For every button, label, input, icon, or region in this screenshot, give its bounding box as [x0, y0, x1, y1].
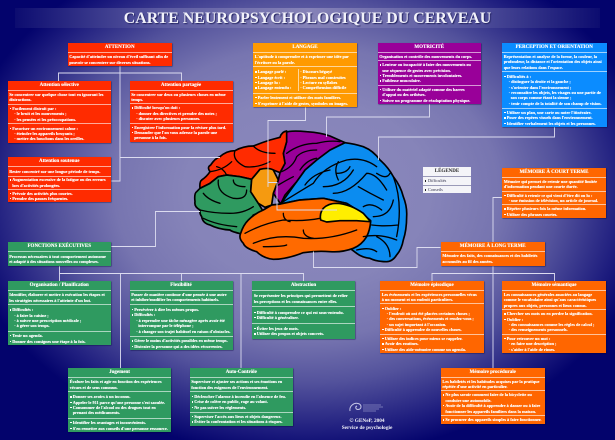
panel: mémoire procédurale — [441, 368, 545, 424]
panel: mémoire épisodique: - des conversations, événements et rendez-vous ; — [387, 316, 474, 321]
panel: flexibilité: et inhiber/modifier les comportements habituels. — [131, 297, 219, 302]
panel: mémoire épisodique: Oublier : — [385, 306, 401, 311]
panel: attention sélective: - mettre des bouchons dans les oreilles. — [14, 136, 84, 141]
panel: jugement: Donner ses avoirs à un inconnu. — [73, 394, 130, 399]
panel: langage: S'exprimer à l'aide de gestes, symboles ou images. — [258, 100, 348, 106]
panel: langage: Parler lentement et utiliser des mots familiers. — [258, 95, 341, 100]
panel: flexibilité: - à reprendre une tâche ménagère après avoir été — [136, 318, 225, 323]
panel: motricité: Utiliser du matériel adapté comme des barres — [382, 87, 465, 92]
panel: perception et orientation: - s'orienter dans l'environnement ; — [509, 85, 571, 90]
panel: organisation / planification — [8, 281, 111, 345]
panel: attention: ATTENTION — [105, 45, 135, 50]
panel: mémoire épisodique: Utiliser des indices pour mieux se rappeler. — [385, 336, 462, 341]
panel: abstraction: Se représenter les principes qui permettent de relier — [254, 293, 348, 298]
panel: motricité: Suivre un programme de réadaptation physique. — [382, 98, 470, 103]
panel: mémoire procédurale: Ne plus savoir comment faire de la bicyclette ou — [445, 392, 532, 397]
panel: attention sélective: distractions. — [9, 97, 32, 102]
panel: mémoire à court terme: d'information pendant une courte durée. — [504, 184, 578, 189]
panel: flexibilité: Distraire la personne qui a des idées récurrentes. — [134, 344, 223, 349]
icon: GENeP logo — [349, 402, 383, 412]
panel: organisation / planification: Identifier, élaborer et mettre à exécution les étapes et — [9, 292, 105, 297]
arrow: perception connector — [378, 127, 554, 160]
panel: perception et orientation: Utiliser un plan, une carte ou noter l'itinéraire. — [507, 110, 592, 115]
panel: perception et orientation — [502, 43, 606, 127]
panel: mémoire procédurale: Mémoire procédurale — [470, 370, 516, 375]
panel: motricité: d'appui ou des orthèses. — [382, 92, 426, 97]
brain: executive functions (green) — [195, 175, 263, 234]
panel: organisation / planification: les stratégies nécessaires à l'atteinte d'un but. — [9, 298, 91, 302]
panel: mémoire sémantique: - s'aider à l'aide de rimes. — [509, 347, 555, 352]
panel: auto-contrôle — [190, 368, 293, 426]
panel: langage: - Phrases mal construites — [300, 75, 346, 80]
panel: perception et orientation: Poser des repères visuels dans l'environnement. — [507, 115, 593, 120]
title banner — [15, 8, 600, 28]
panel: langage — [253, 43, 357, 107]
panel: mémoire à court terme — [502, 168, 606, 218]
panel: attention soutenue: Augmentation excessive de la fatigue ou des erreurs — [12, 177, 106, 182]
panel: attention partagée: personne à la fois. — [134, 135, 167, 140]
panel: perception et orientation: profondeur, la distance et l'orientation des objets ainsi — [504, 59, 602, 64]
panel: attention partagée: Difficulté lorsqu'on doit : — [134, 105, 180, 110]
panel: mémoire sémantique: - des renseignements personnels. — [509, 327, 568, 332]
panel: organisation / planification: Organisation / Planification — [30, 283, 89, 288]
panel: mémoire à court terme: Difficulté à retenir ce qui vient d'être dit ou lu : — [507, 193, 592, 198]
panel: jugement: Identifier les avantages et inconvénients. — [73, 420, 146, 425]
panel: attention partagée: Attention partagée — [161, 83, 201, 88]
panel: flexibilité: interrompue par le téléphone ; — [138, 323, 194, 328]
panel: langage: - Compréhension difficile — [300, 85, 346, 90]
panel: auto-contrôle: Déclencher l'alarme à incendie en l'absence de feu. — [194, 394, 286, 399]
panel: attention sélective: - les pensées et les préoccupations. — [14, 117, 76, 122]
panel: mémoire épisodique: Mémoire épisodique — [410, 283, 454, 288]
panel: jugement: Évaluer les faits et agir en fonction des expériences — [70, 379, 162, 384]
brain: language area (amber) — [251, 168, 278, 207]
panel: mémoire épisodique: Utiliser des aide-mémoire comme un agenda. — [385, 347, 466, 352]
panel: mémoire à court terme: Mémoire qui permet de retenir une quantité limitée — [504, 179, 597, 184]
panel: attention sélective: Attention sélective — [40, 83, 79, 88]
panel: attention partagée: Se concentrer sur deux ou plusieurs choses en même — [131, 92, 226, 97]
panel: mémoire à court terme: MÉMOIRE À COURT TERME — [520, 170, 588, 175]
arrow: motor connector — [326, 104, 430, 137]
brain: short-term memory (yellow) — [320, 203, 371, 222]
panel: attention soutenue: Prévoir des activités plus courtes. — [12, 191, 73, 196]
panel: fonctions exécutives: FONCTIONS EXÉCUTIVES — [28, 244, 91, 249]
panel: mémoire à court terme: Utiliser des phrases courtes. — [507, 212, 557, 217]
panel: motricité: Faiblesse musculaire. — [382, 78, 421, 83]
panel: langage: Langage lu : — [258, 80, 280, 85]
panel: attention partagée: Demander que l'on vous adresse la parole une — [134, 130, 217, 135]
panel: motricité: Tremblements et mouvements involontaires. — [382, 73, 462, 78]
panel: attention soutenue: Attention soutenue — [39, 159, 79, 164]
panel: langage: Langage parlé : — [258, 69, 286, 74]
panel: mémoire sémantique: Pour retrouver un mot : — [507, 336, 550, 341]
panel: motricité — [378, 43, 481, 104]
panel: mémoire sémantique — [502, 281, 606, 353]
brain: memory region (orange temporal lobe) — [240, 198, 371, 259]
panel: jugement: Jugement — [109, 370, 130, 375]
panel: mémoire sémantique: Chercher ses mots ou en perdre la signification. — [507, 311, 593, 316]
arrow: attention connectors — [58, 66, 220, 181]
panel: mémoire épisodique: Difficulté à apprendre de nouvelles choses. — [385, 327, 462, 332]
panel: attention: pouvoir se concentrer sur diverses situations. — [69, 60, 151, 64]
panel: perception et orientation: que leurs relations dans l'espace. — [504, 65, 563, 70]
panel: perception et orientation: Représentation et analyse de la forme, la couleur, la — [504, 54, 597, 59]
panel: flexibilité: Gérer le moins d'activités possibles en même temps. — [134, 338, 228, 343]
panel: attention sélective — [8, 81, 111, 143]
panel: organisation / planification: - à suivre une prescription médicale ; — [14, 318, 81, 323]
panel: motricité: Lenteur ou incapacité à faire des mouvements ou — [382, 62, 471, 67]
panel: mémoire procédurale: conduire une automobile. — [445, 398, 491, 403]
panel: organisation / planification: - à faire la cuisine ; — [14, 313, 49, 318]
panel: langage: l'écriture ou la parole. — [255, 60, 295, 64]
panel: flexibilité: Flexibilité — [170, 283, 192, 288]
panel: langage: - Discours bégayé — [300, 69, 332, 74]
arrow: language connectors — [268, 107, 337, 210]
panel: flexibilité: Passer de manière continue d'une pensée à une autre — [131, 292, 227, 297]
panel: perception et orientation: - tenir compte de la totalité de son champ de vision. — [509, 101, 602, 106]
panel: abstraction — [252, 281, 355, 339]
panel: motricité: MOTRICITÉ — [414, 45, 444, 50]
panel: auto-contrôle: Éviter la confrontation et les situations à risques. — [194, 419, 283, 424]
panel: fonctions exécutives: Processus nécessaires à tout comportement autonome — [9, 254, 106, 259]
panel: mémoire procédurale: Se procurer des appareils simples à faire fonctionner. — [445, 417, 541, 422]
panel: attention sélective: - éteindre les appareils bruyants ; — [14, 131, 75, 136]
panel: abstraction: Éviter les jeux de mots. — [257, 326, 299, 331]
panel: mémoire procédurale: Les habiletés et les habitudes acquises par la pratique — [442, 379, 539, 384]
panel: mémoire épisodique: Les événements et les expériences personnelles vécus — [382, 292, 477, 297]
panel: flexibilité — [130, 281, 232, 350]
panel: jugement: vécues et de sens commun. — [70, 384, 118, 390]
brain: parietal lobe (blue) — [281, 143, 407, 262]
panel: attention partagée: temps. — [131, 97, 143, 102]
panel: mémoire sémantique: - des connaissances comme les règles de calcul ; — [509, 322, 594, 327]
panel: mémoire à long terme: accumulés au fil des années. — [442, 259, 493, 264]
panel: mémoire sémantique: Mémoire sémantique — [531, 283, 577, 288]
panel: mémoire à long terme: MÉMOIRE À LONG TERME — [460, 244, 526, 249]
panel: auto-contrôle: Ne pas suivre les règlements. — [194, 405, 246, 410]
panel: mémoire épisodique: - l'endroit où ont été placées certaines choses ; — [387, 311, 470, 316]
panel: auto-contrôle: Auto-Contrôle — [226, 370, 257, 375]
credit: Service de psychologie — [342, 425, 392, 431]
panel: mémoire sémantique: Oublier : — [507, 317, 523, 322]
panel: flexibilité: Persévérer à dire les mêmes propos. — [134, 307, 199, 312]
panel: attention soutenue: Rester concentré sur une longue période de temps. — [9, 169, 100, 174]
panel: attention soutenue: Prendre des pauses fréquentes. — [12, 196, 68, 201]
panel: organisation / planification: Donner des consignes une étape à la fois. — [12, 338, 86, 344]
panel: fonctions exécutives: et adapté à des situations nouvelles ou complexes. — [9, 259, 99, 264]
panel: auto-contrôle: Superviser et ajuster ses actions et ses émotions en — [191, 379, 282, 384]
panel: attention soutenue — [8, 157, 111, 202]
panel: flexibilité: Difficultés : — [134, 312, 155, 317]
panel: perception et orientation: - distinguer la droite et la gauche ; — [509, 79, 571, 84]
panel: mémoire sémantique: Les connaissances générales associées au langage — [504, 292, 592, 297]
panel: mémoire sémantique: - en faire une description ; — [509, 341, 556, 346]
panel: organisation / planification: Difficultés : — [12, 307, 33, 312]
arrow: memory connectors — [314, 198, 554, 368]
legend — [423, 167, 471, 193]
panel: jugement: S'en remettre aux conseils d'une personne ressource. — [73, 426, 168, 430]
panel: attention partagée: - discuter avec plusieurs personnes. — [136, 116, 200, 121]
panel: auto-contrôle: Crise de colère en public, rage au volant. — [194, 399, 268, 404]
panel: motricité: une séquence de gestes avec précision. — [382, 68, 451, 73]
panel: abstraction: Difficulté à comprendre ce qui est sous-entendu. — [257, 310, 344, 315]
panel: mémoire à long terme — [441, 242, 545, 266]
panel: attention: Capacité d'atteindre un niveau d'éveil suffisant afin de — [69, 54, 168, 59]
panel: perception et orientation: son corps comme étant la sienne ; — [511, 95, 571, 100]
panel: langage: - Lecture en syllabes — [300, 80, 337, 85]
credit — [342, 418, 392, 431]
panel: mémoire épisodique: Avoir des routines. — [385, 341, 419, 346]
panel: mémoire sémantique: propres aux objets, personnes et lieux connus. — [504, 303, 587, 308]
panel: abstraction: les perceptions et les connaissances entre elles. — [254, 299, 337, 304]
legend: Difficultés — [428, 178, 446, 183]
panel: mémoire épisodique: - un sujet important à l'occasion. — [387, 322, 446, 327]
panel: attention sélective: Favoriser un environnement calme : — [12, 126, 78, 131]
panel: mémoire épisodique: à un moment et un endroit particuliers. — [382, 297, 453, 302]
panel: langage: LANGAGE — [292, 45, 318, 50]
panel: motricité: Organisation et contrôle des mouvements du corps. — [379, 54, 472, 59]
panel: organisation / planification: Tenir un agenda. — [12, 333, 43, 338]
panel: langage: L'aptitude à comprendre et à exprimer une idée par — [255, 54, 349, 59]
panel: mémoire à long terme: Mémoire des faits, des connaissances et des habiletés — [442, 253, 537, 258]
panel: abstraction: Abstraction — [291, 283, 316, 288]
panel: fonctions exécutives — [8, 242, 111, 266]
panel: perception et orientation: Difficultés à : — [507, 74, 531, 79]
panel: attention — [68, 43, 172, 66]
panel: langage: Langage entendu : — [258, 85, 291, 90]
panel: attention sélective: Facilement distrait par : — [12, 106, 56, 111]
credit: © GENeP, 2004 — [349, 418, 385, 424]
panel: jugement — [68, 368, 171, 432]
panel: attention partagée: - donner des directives et prendre des notes ; — [136, 111, 217, 116]
panel: auto-contrôle: fonction des exigences de l'environnement. — [191, 385, 268, 390]
panel: attention partagée: Enregistrer l'information pour la réviser plus tard. — [134, 125, 226, 130]
panel: jugement: prenant des médicaments. — [73, 410, 120, 415]
panel: jugement: Consommer de l'alcool ou des drogues tout en — [73, 405, 156, 410]
title: CARTE NEUROPSYCHOLOGIQUE DU CERVEAU — [124, 10, 491, 26]
panel: attention sélective: - le bruit et les mouvements ; — [14, 111, 67, 116]
panel: auto-contrôle: Superviser l'accès aux lieux et objets dangereux. — [194, 414, 282, 419]
panel: perception et orientation: PERCEPTION ET ORIENTATION — [516, 45, 593, 50]
panel: abstraction: Difficulté à généraliser. — [257, 315, 299, 320]
brain: motor cortex (purple) — [273, 131, 345, 204]
panel: attention sélective: Se concentrer sur quelque chose tout en ignorant les — [9, 92, 103, 97]
panel: mémoire épisodique — [380, 281, 484, 353]
panel: mémoire procédurale: fonctionner les appareils familiers dans la maison. — [445, 408, 536, 414]
panel: organisation / planification: - à gérer son temps. — [14, 323, 50, 328]
arrow: executive functions connectors — [60, 212, 304, 368]
panel: flexibilité: - à changer son trajet habituel en raison d'obstacles. — [136, 329, 230, 334]
panel: mémoire à court terme: Répéter plusieurs fois la même information. — [507, 206, 586, 211]
legend: LÉGENDE — [435, 169, 459, 174]
panel: perception et orientation: - reconnaître les objets, les visages ou une partie de — [509, 90, 601, 95]
panel: attention partagée — [130, 81, 232, 142]
brain: attention region (red) — [200, 131, 287, 188]
panel: perception et orientation: Identifier verbalement les objets et les personnes. — [507, 121, 596, 126]
panel: abstraction: Utiliser des propos et objets concrets. — [257, 331, 324, 336]
panel: mémoire à court terme: - une émission de télévision, un article de journal. — [509, 198, 598, 203]
panel: langage: Langage écrit : — [258, 75, 285, 80]
panel: mémoire procédurale: Avoir de la difficulté à apprendre à danser ou à faire — [445, 403, 540, 408]
legend: Conseils — [428, 187, 443, 192]
panel: mémoire sémantique: comme le vocabulaire ainsi qu'aux caractéristiques — [504, 297, 596, 302]
panel: attention soutenue: lors d'activités prolongées. — [12, 183, 60, 188]
brain: sulci — [200, 141, 399, 257]
panel: jugement: Appeler le 911 parce qu'une personne s'est saoulée. — [73, 400, 165, 405]
panel: mémoire procédurale: répétée d'une activité en particulier. — [442, 384, 508, 389]
